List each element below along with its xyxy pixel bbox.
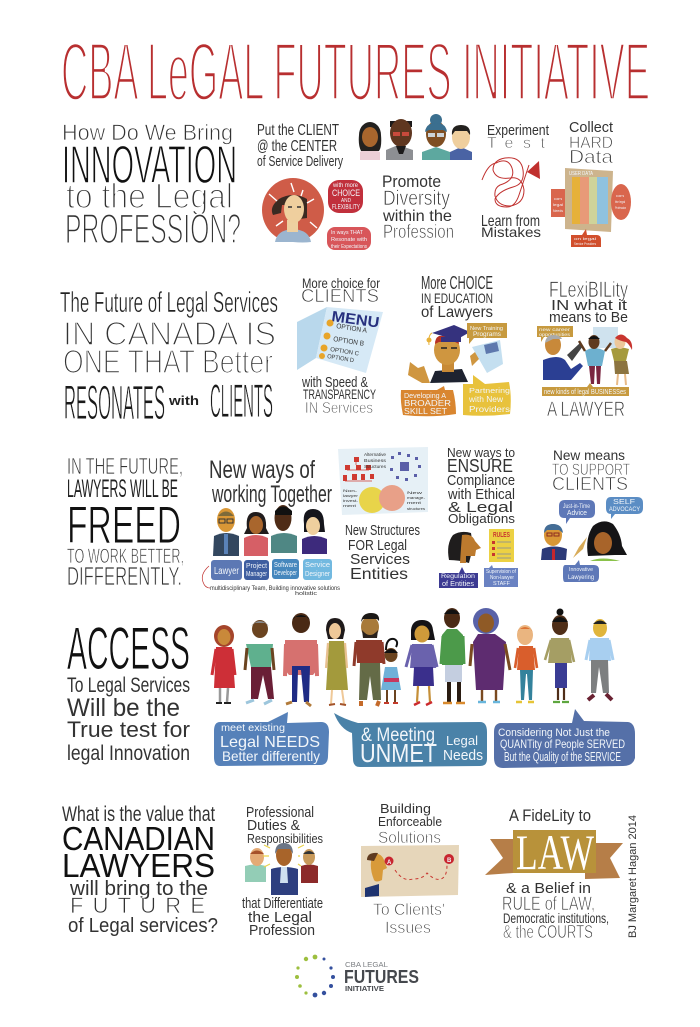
text: learn from mistakes: Learn from (481, 213, 540, 230)
panel: future of legal services heading (60, 287, 278, 430)
callout: supervision of non-lawyer staff: STAFF (493, 581, 511, 587)
person 11 (586, 619, 613, 700)
panel: value of canadian lawyers heading: What is the value that (62, 803, 215, 826)
banner: new kinds of legal businesses (542, 383, 629, 396)
callout: with more choice and flexibility: AND (341, 198, 351, 204)
callout: just-in-time advice (559, 500, 595, 524)
callout: developing a broader skill set: BROADER (404, 399, 451, 408)
callout: self advocacy: SELF (613, 499, 635, 506)
callout: supervision of non-lawyer staff (484, 565, 518, 587)
callout: meeting unmet legal needs: Legal (446, 733, 478, 748)
text: with speed and transparency: TRANSPARENCY (303, 386, 376, 402)
text: professional duties (246, 804, 323, 846)
text: new structures for legal services entities: New Structures (345, 522, 420, 539)
callout: innovative lawyering: Innovative (569, 567, 593, 573)
callout: meet existing legal needs (214, 712, 329, 766)
label: service designer (303, 559, 332, 580)
panel: alternative business structures: Business (364, 458, 387, 463)
callout: meet existing legal needs: Better differently (222, 748, 320, 764)
callout: with more choice and flexibility (328, 180, 363, 213)
text: building enforceable solutions (378, 801, 442, 847)
panel: alternative business structures: structures (407, 506, 425, 511)
text: belief in rule of law: & a Belief in (506, 880, 591, 897)
icon: menu: OPTION D (327, 354, 355, 364)
panel: user data sheet with bubbles: on (616, 193, 624, 198)
panel: value of canadian lawyers heading: will bring to the (69, 878, 208, 900)
text: that differentiate: that Differentiate (242, 895, 323, 912)
label: service designer: Designer (305, 569, 330, 578)
text: promote diversity (382, 172, 454, 243)
callout: in ways that resonate: their Expectations (331, 244, 367, 250)
callout: quantity and quality of service (494, 709, 635, 768)
text: new means to support clients: TO SUPPORT (552, 460, 630, 479)
panel: in the future heading: TO WORK BETTER, (67, 545, 184, 568)
text: with speed and transparency: IN Services (305, 400, 373, 417)
text: more choice in education: More CHOICE (421, 273, 493, 293)
text: building enforceable solutions: Solutions (378, 828, 441, 847)
panel: future of legal services heading: IN CANADA IS (63, 315, 276, 352)
label: software developer: Developer (274, 570, 297, 577)
text: new ways to ensure compliance: New ways to (447, 445, 515, 460)
text: put the client at the center: @ the CENTER (257, 138, 337, 155)
text: multidisciplinary team: multidisciplinary Team, Building innovative solutions (210, 585, 341, 592)
text: to clients issues: To Clients' (373, 900, 445, 919)
panel: value of canadian lawyers heading: LAWYERS (62, 847, 215, 884)
callout: partnering with new providers (463, 375, 511, 416)
text: a fidelity to: A FideLity to (509, 806, 591, 825)
banner: new kinds of legal businesses: new kinds of legal BUSINESSes (544, 387, 626, 396)
callout: with more choice and flexibility: with more (332, 183, 359, 189)
text: more choice in education: of Lawyers (421, 304, 493, 321)
logo: CBA legal futures initiative (295, 955, 419, 997)
callout: meeting unmet legal needs (334, 713, 487, 768)
callout: supervision of non-lawyer staff: Non-lawyer (490, 575, 514, 581)
text: artist credit: BJ Margaret Hagan 2014 (627, 815, 639, 938)
panel: alternative business structures: Non- (343, 488, 358, 493)
person 1 (212, 625, 235, 703)
text: flexibility in what it means: IN what it (551, 297, 628, 314)
logo: CBA legal futures initiative: FUTURES (344, 967, 419, 987)
icon: menu: OPTION A (336, 323, 368, 335)
panel: in the future heading: IN THE FUTURE, (67, 453, 183, 479)
text: that differentiate: Profession (249, 922, 315, 939)
callout: new training programs (467, 323, 507, 344)
icon: ring of dots (295, 955, 335, 997)
text: with speed and transparency (301, 374, 376, 417)
panel: future of legal services heading: ONE THAT Better (63, 343, 273, 380)
text: new structures for legal services entities: FOR Legal (348, 537, 407, 554)
person 4 (326, 618, 348, 705)
text: resonates with clients: with (168, 393, 199, 408)
text: multidisciplinary team: holistic (295, 591, 317, 597)
panel: user data sheet with bubbles: the legal (615, 199, 625, 204)
text: new structures for legal services entities: Entities (350, 566, 408, 583)
panel: user data sheet with bubbles: Needs (553, 208, 563, 213)
person 6 (406, 620, 437, 705)
callout: in ways that resonate: In ways THAT (331, 230, 364, 236)
text: more choice in education (421, 273, 493, 321)
panel: future of legal services heading: The Future of Legal Services (60, 287, 278, 319)
text: with speed and transparency: with Speed & (301, 374, 368, 391)
panel: value of canadian lawyers heading: FUTURE (70, 893, 205, 918)
text: to clients issues: Issues (385, 918, 431, 937)
text: belief in rule of law: Democratic institutions, (503, 910, 609, 926)
callout: regulation of entities: Regulation (441, 574, 475, 580)
text: more choice for clients (301, 275, 380, 306)
icon: rules sheet: RULES (493, 532, 510, 539)
text: flexibility in what it means: FLexiBILity (549, 277, 628, 302)
callout: just-in-time advice: Just-in-Time (563, 504, 591, 510)
callout: innovative lawyering (563, 560, 599, 582)
label: lawyer: Lawyer (214, 566, 240, 577)
text: flexibility in what it means: means to Be (549, 309, 628, 326)
callout: developing a broader skill set: SKILL SET (404, 407, 447, 416)
text: multidisciplinary team (202, 566, 341, 597)
icon: menu (297, 307, 383, 373)
panel: innovation heading (62, 120, 241, 252)
icon: three professionals with map (543, 327, 632, 385)
callout: regulation of entities (439, 567, 478, 588)
text: learn from mistakes: Mistakes (481, 224, 541, 240)
text: belief in rule of law (502, 880, 609, 942)
text: new ways to ensure compliance: ENSURE (447, 456, 513, 476)
text: experiment test: Experiment (487, 122, 550, 139)
icon: rules sheet (489, 529, 514, 562)
panel: in the future heading (67, 453, 184, 591)
label: project manager: Manager (246, 571, 267, 578)
text: more choice for clients: More choice for (302, 275, 380, 291)
callout: innovative lawyering: Lawyering (568, 574, 594, 581)
panel: access heading: True test for (67, 717, 190, 742)
label: software developer (272, 559, 299, 579)
text: collect hard data: Data (569, 147, 614, 167)
callout: meeting unmet legal needs: Needs (443, 747, 483, 764)
panel: user data sheet with bubbles: Service Providers (574, 241, 596, 246)
panel: user data sheet with bubbles: on (554, 196, 562, 201)
text: ACCESS (67, 615, 190, 682)
icon: woman in profile (448, 532, 481, 563)
logo: CBA legal futures initiative: CBA LEGAL (345, 960, 388, 969)
text: that differentiate (242, 895, 323, 939)
text: belief in rule of law: RULE of LAW, (502, 894, 595, 915)
panel: alternative business structures: manage- (407, 495, 426, 500)
text: learn from mistakes (481, 213, 541, 240)
text: promote diversity: within the (382, 208, 452, 225)
callout: developing a broader skill set (401, 386, 456, 416)
callout: partnering with new providers: Partnering (469, 386, 510, 395)
panel: alternative business structures: ment (343, 503, 357, 508)
callout: just-in-time advice: Advice (567, 510, 587, 517)
text: experiment test: Test (487, 135, 546, 152)
callout: meet existing legal needs: meet existing (221, 723, 285, 734)
callout: partnering with new providers: Providers (469, 404, 510, 414)
callout: meeting unmet legal needs: & Meeting (361, 725, 435, 746)
logo: CBA legal futures initiative: INITIATIVE (345, 984, 384, 993)
callout: meet existing legal needs: Legal NEEDS (220, 734, 320, 751)
panel: in the future heading: FREED (67, 496, 181, 555)
panel: alternative business structures: New (407, 490, 422, 495)
text: flexibility in what it means (549, 277, 628, 326)
callout: in ways that resonate (327, 227, 371, 250)
panel: value of canadian lawyers heading (62, 803, 218, 937)
icon: lawyer and client (541, 521, 627, 561)
person 8 (470, 608, 510, 702)
child (381, 639, 401, 703)
text: professional duties: Responsibilities (247, 831, 323, 846)
icon: menu: OPTION C (330, 347, 360, 358)
panel: innovation heading: to the Legal (66, 177, 233, 216)
callout: new training programs: Programs (473, 332, 501, 338)
callout: quantity and quality of service: Considering Not Just the (498, 727, 610, 739)
person 7 (441, 608, 465, 703)
panel: alternative business structures: ment (407, 500, 422, 505)
text: to clients issues (373, 900, 445, 937)
text: promote diversity: Diversity (383, 187, 450, 210)
callout: partnering with new providers: with New (468, 395, 503, 404)
panel: alternative business structures: lawyer (343, 493, 359, 498)
text: new ways to ensure compliance: Obligations (448, 511, 516, 526)
label: project manager (244, 560, 269, 580)
callout: new career opportunities: opportunities (539, 332, 571, 337)
text: building enforceable solutions: Enforceable (378, 814, 442, 829)
panel: user data sheet with bubbles (551, 168, 631, 247)
panel: innovation heading: INNOVATION (62, 135, 237, 195)
panel: alternative business structures: invest- (343, 498, 359, 503)
text: put the client at the center (257, 122, 343, 170)
person 2 (245, 620, 274, 704)
text: new ways to ensure compliance: with Ethical (447, 486, 515, 503)
panel: access heading: Will be the (67, 694, 180, 722)
label: software developer: Software (274, 562, 297, 569)
callout: developing a broader skill set: Developing A (404, 393, 446, 400)
icon: red scribble arrow (482, 158, 540, 207)
callout: regulation of entities: of Entities (442, 581, 475, 588)
panel: alternative business structures: Structures (364, 464, 387, 469)
text: new means to support clients: New means (553, 447, 625, 463)
panel: in the future heading: DIFFERENTLY. (67, 561, 182, 591)
text: promote diversity: Promote (382, 172, 441, 191)
label: lawyer (211, 560, 242, 580)
panel: access heading (67, 615, 190, 765)
callout: self advocacy: ADVOCACY (609, 506, 641, 513)
text: new ways to ensure compliance: Compliance (447, 472, 515, 489)
panel: user data sheet with bubbles: USER DATA (569, 171, 594, 177)
text: promote diversity: Profession (383, 222, 454, 243)
panel: user data sheet with bubbles: Profession (615, 205, 626, 210)
callout: supervision of non-lawyer staff: Supervision of (486, 569, 517, 575)
text: collect hard data: HARD (569, 133, 613, 152)
text: more choice in education: IN EDUCATION (421, 290, 493, 306)
chart: row of diverse people (212, 608, 613, 706)
callout: new training programs: New Training (470, 326, 503, 332)
callout: in ways that resonate: Resonate with (331, 237, 367, 243)
callout: with more choice and flexibility: CHOICE (332, 188, 360, 198)
person 9 (515, 625, 537, 702)
icon: team of four (213, 505, 327, 556)
panel: alternative business structures (338, 447, 428, 515)
person 10 (545, 608, 574, 702)
callout: with more choice and flexibility: FLEXIBILITY (332, 204, 360, 211)
panel: user data sheet with bubbles: legal (553, 202, 563, 207)
text: new means to support clients (552, 447, 630, 494)
icon: menu: MENU (330, 308, 380, 332)
text: belief in rule of law: & the COURTS (503, 922, 593, 942)
person 3 (285, 613, 317, 706)
panel: user data sheet with bubbles: on legal (574, 236, 596, 241)
text: put the client at the center: of Service Delivery (257, 153, 343, 170)
text: new structures for legal services entities: Services (350, 551, 410, 568)
panel: innovation heading: PROFESSION? (65, 205, 241, 252)
panel: in the future heading: LAWYERS WILL BE (67, 475, 178, 503)
text: resonates with clients: RESONATES (64, 377, 165, 430)
icon: client surrounded by arrows (262, 178, 324, 242)
panel: path from a to b: B (447, 858, 452, 864)
text: collect hard data: Collect (569, 119, 614, 136)
person 5 (354, 613, 384, 706)
callout: new career opportunities (537, 326, 573, 342)
text: resonates with clients (64, 374, 273, 430)
icon: four diverse faces (359, 114, 472, 160)
label: project manager: Project (246, 563, 267, 570)
callout: quantity and quality of service: But the Quality of the SERVICE (504, 749, 621, 764)
label: service designer: Service (305, 560, 330, 569)
text: a lawyer: A LAWYER (547, 398, 625, 421)
icon: three professionals (245, 843, 318, 895)
text: building enforceable solutions: Building (380, 801, 431, 816)
panel: alternative business structures: Alternative (364, 452, 387, 457)
text: new means to support clients: CLIENTS (552, 474, 628, 494)
text: new ways of working together (209, 456, 332, 508)
panel: access heading: To Legal Services (67, 674, 190, 697)
text: new ways of working together: working Together (211, 481, 332, 508)
text: put the client at the center: Put the CLIENT (257, 122, 339, 139)
callout: self advocacy (606, 497, 643, 519)
text: that differentiate: the Legal (248, 909, 312, 926)
text: more choice for clients: CLIENTS (301, 286, 379, 306)
panel: value of canadian lawyers heading: of Legal services? (68, 915, 218, 937)
text: new ways of working together: New ways of (209, 456, 315, 484)
icon: graduate with laptop (408, 325, 503, 383)
text: experiment test (487, 122, 550, 152)
panel: path from a to b (361, 845, 459, 897)
panel: innovation heading: How Do We Bring (62, 120, 233, 145)
text: CLIENTS (210, 374, 273, 427)
panel: value of canadian lawyers heading: CANADIAN (62, 820, 215, 857)
text: new ways to ensure compliance (447, 445, 516, 526)
icon: menu: OPTION B (333, 336, 365, 348)
text: professional duties: Duties & (247, 817, 300, 834)
callout: meeting unmet legal needs: UNMET (360, 738, 437, 768)
panel: path from a to b: A (387, 860, 392, 866)
panel: access heading: legal Innovation (67, 742, 190, 765)
text: new ways to ensure compliance: & Legal (448, 499, 513, 516)
text: new structures for legal services entities (345, 522, 420, 583)
text: professional duties: Professional (246, 804, 314, 821)
text: collect hard data (569, 119, 614, 167)
callout: new career opportunities: new career (539, 327, 571, 332)
banner: law ribbon: LAW (516, 824, 595, 880)
callout: quantity and quality of service: QUANTity of People SERVED (500, 737, 625, 751)
